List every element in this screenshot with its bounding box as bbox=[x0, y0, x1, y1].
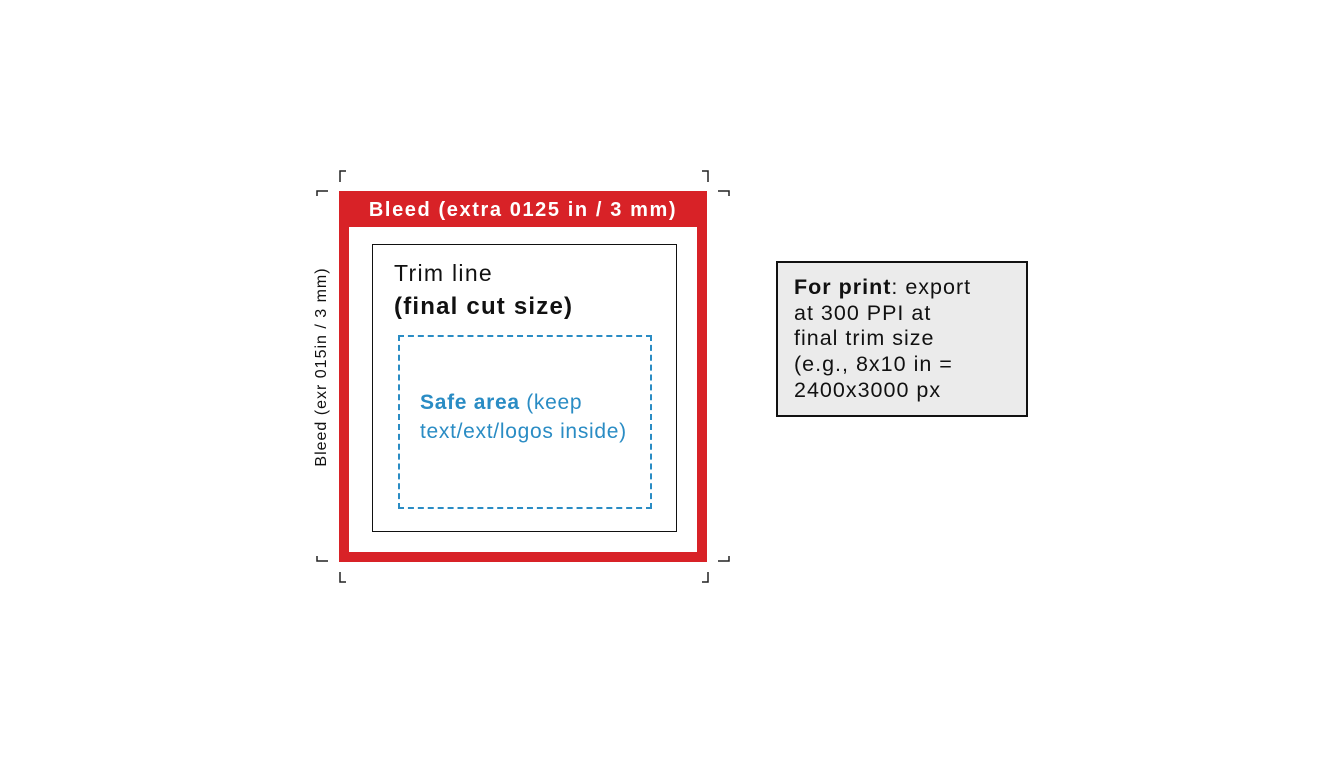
vertical bleed label: Bleed (exr 015in / 3 mm) bbox=[313, 267, 330, 467]
bleed frame bbox=[339, 191, 707, 562]
safe area text: Safe area (keep bbox=[420, 391, 582, 414]
print note callout: (e.g., 8x10 in = bbox=[794, 352, 953, 376]
print note callout: For print: export bbox=[794, 275, 971, 299]
trim line box bbox=[372, 244, 677, 532]
safe area bbox=[398, 335, 652, 509]
print note callout: at 300 PPI at bbox=[794, 301, 931, 325]
trim text: (final cut size) bbox=[394, 293, 573, 320]
trim text bbox=[394, 260, 573, 320]
print note callout: final trim size bbox=[794, 326, 934, 350]
print note callout bbox=[776, 261, 1028, 417]
print note callout: 2400x3000 px bbox=[794, 378, 941, 402]
trim text: Trim line bbox=[394, 260, 493, 286]
bleed label: Bleed (extra 0125 in / 3 mm) bbox=[369, 199, 677, 221]
safe area text: text/ext/logos inside) bbox=[420, 420, 627, 443]
safe area text bbox=[420, 391, 627, 443]
